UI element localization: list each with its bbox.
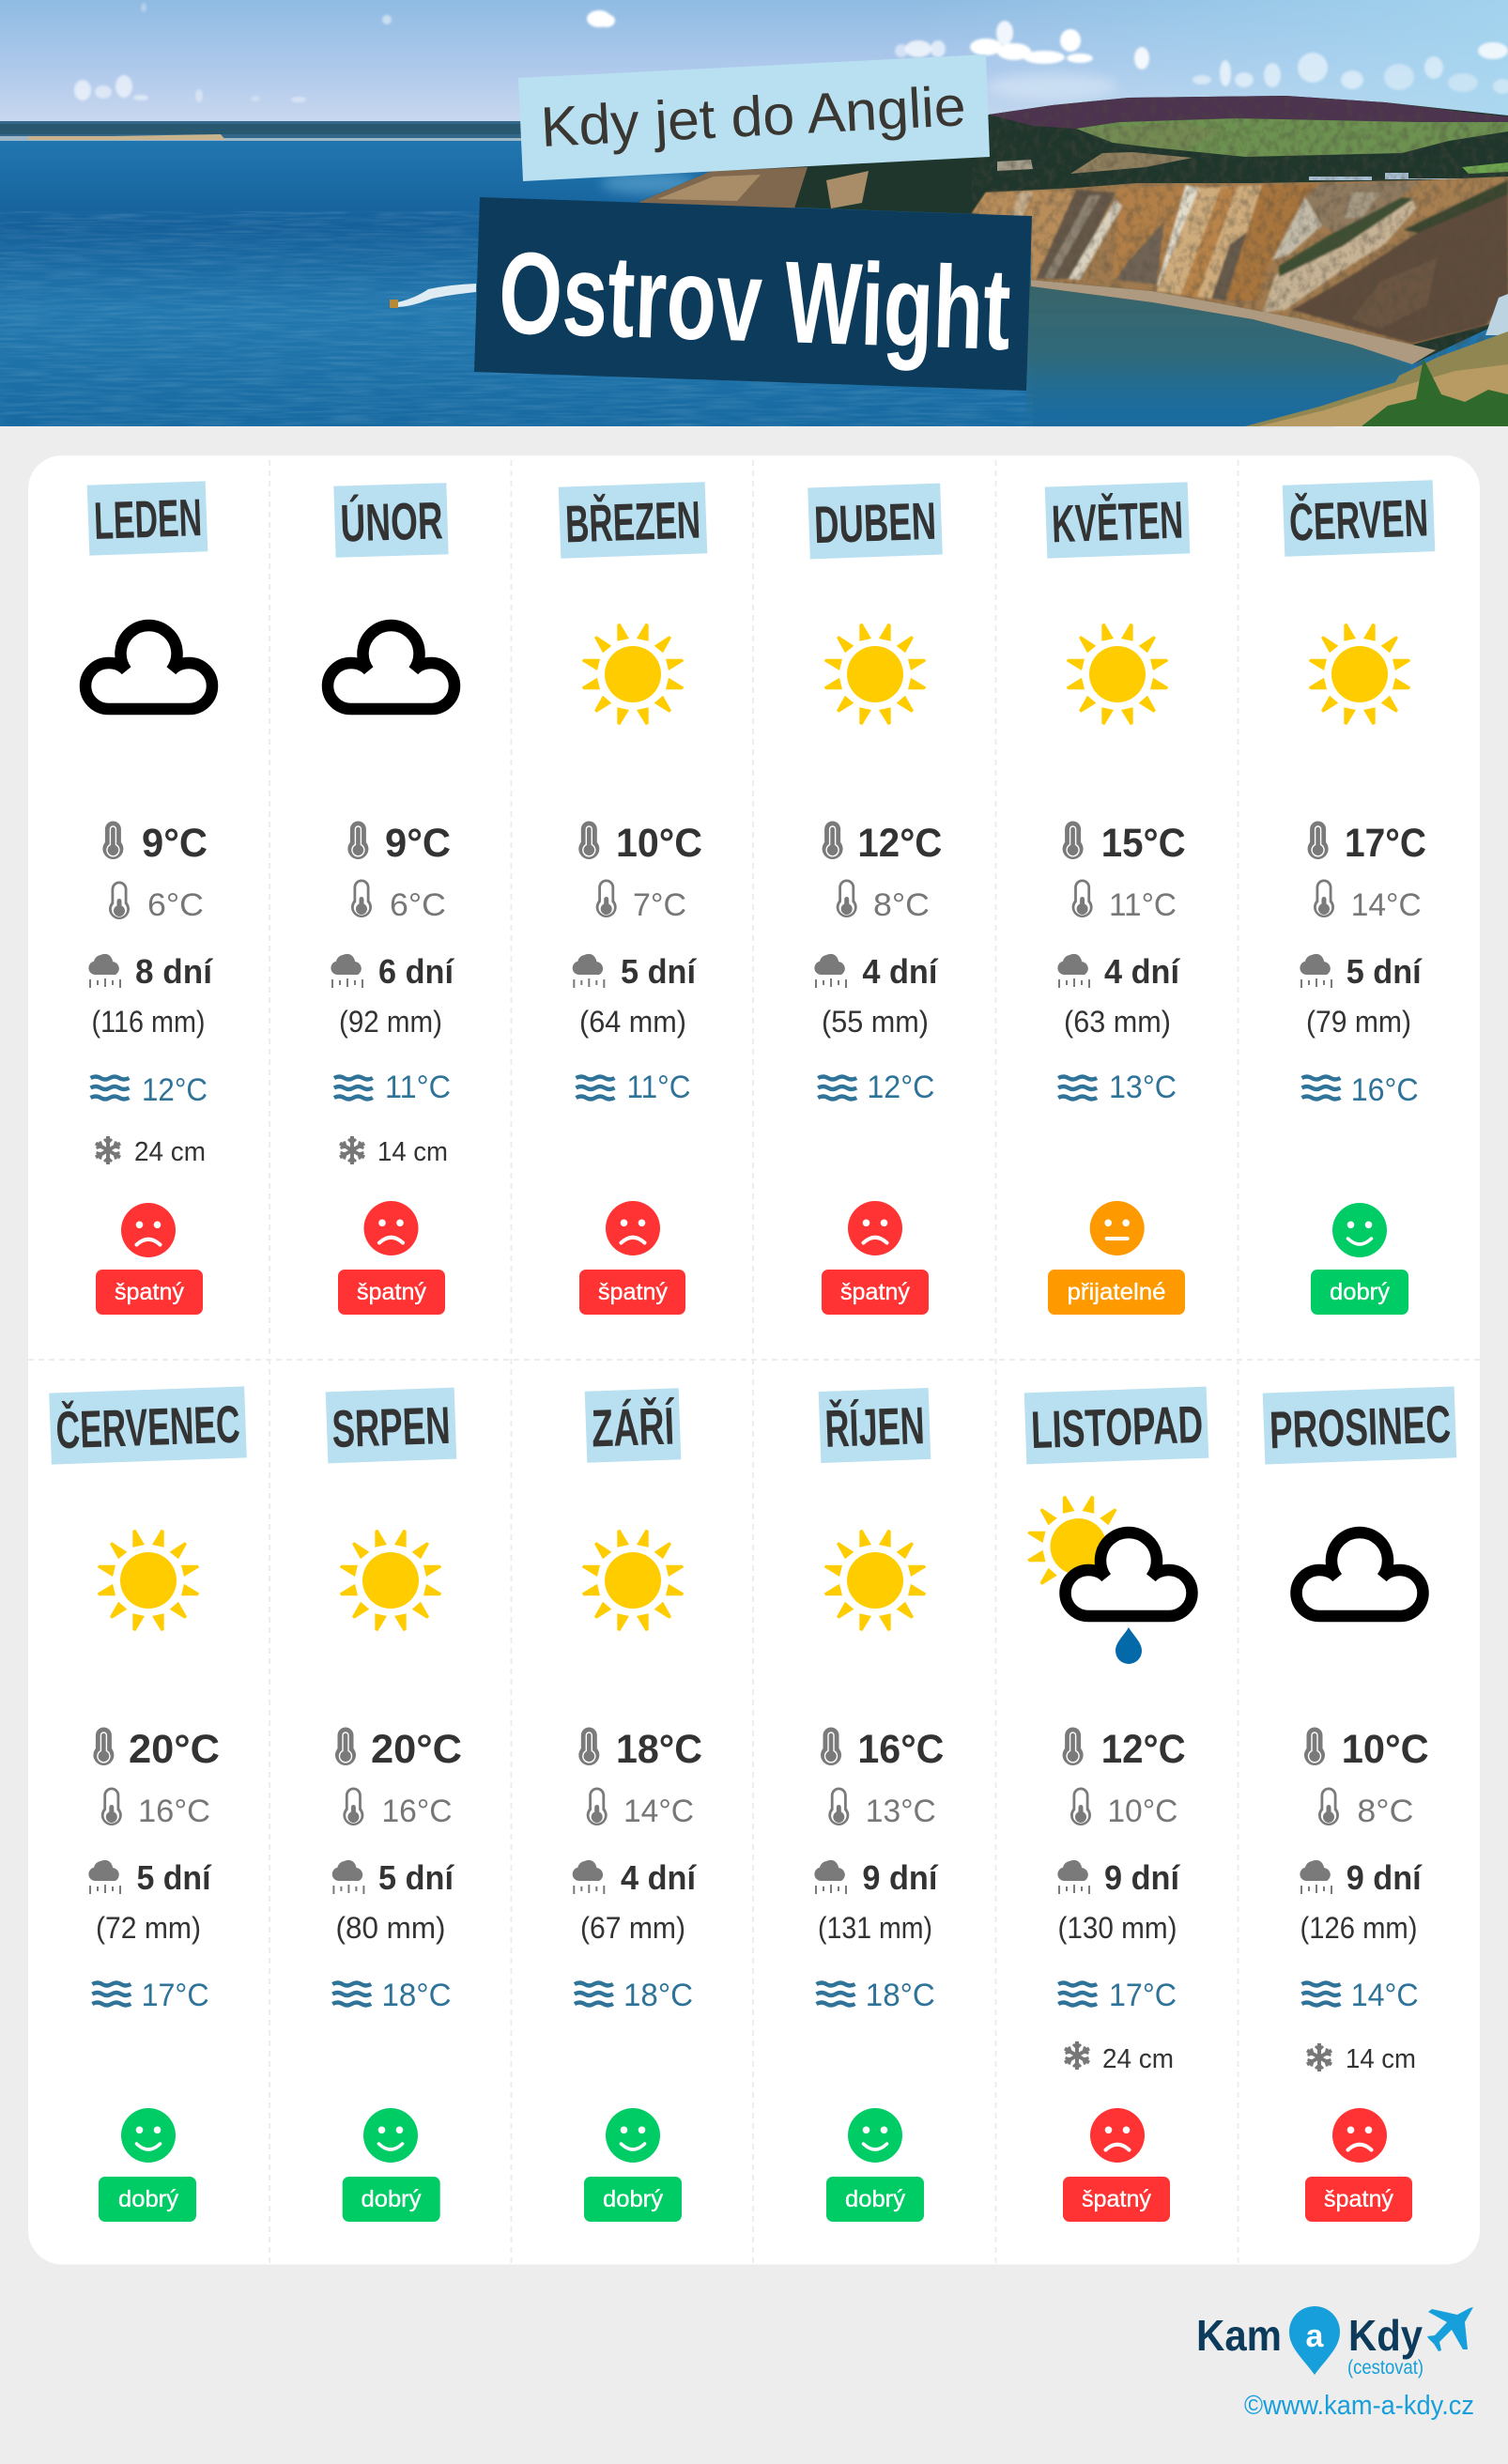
land base bbox=[639, 96, 1508, 364]
month column: Leden bbox=[85, 481, 213, 1315]
sea temperature bbox=[818, 1070, 934, 1105]
month label bbox=[49, 1386, 247, 1465]
low temperature: 6°C bbox=[147, 887, 204, 923]
rating: good: dobrý bbox=[845, 2186, 906, 2212]
month label: LEDEN bbox=[93, 487, 203, 550]
rating: bad bbox=[822, 1201, 929, 1315]
precipitation: (64 mm) bbox=[579, 1005, 686, 1039]
month label: ZÁŘÍ bbox=[591, 1395, 676, 1458]
month label bbox=[819, 1388, 931, 1463]
low temperature bbox=[1314, 879, 1422, 923]
rating: good bbox=[1311, 1203, 1408, 1315]
high temperature: 12°C bbox=[1101, 1727, 1186, 1772]
rainy days: 9 dní bbox=[1346, 1858, 1423, 1897]
precipitation: (67 mm) bbox=[580, 1911, 685, 1945]
precipitation: (72 mm) bbox=[96, 1911, 201, 1945]
rating: bad: špatný bbox=[598, 1279, 668, 1305]
low temperature: 11°C bbox=[1109, 887, 1177, 923]
icon: sun bbox=[582, 624, 684, 725]
month column: Říjen bbox=[814, 1388, 944, 2222]
rainy days bbox=[573, 1858, 697, 1897]
low temperature: 14°C bbox=[1351, 887, 1422, 923]
sea temperature: 18°C bbox=[381, 1978, 451, 2013]
high temperature: 16°C bbox=[857, 1727, 944, 1772]
panel: months card bbox=[28, 455, 1480, 2265]
high temperature: 15°C bbox=[1101, 821, 1186, 866]
sea temperature bbox=[92, 1978, 209, 2013]
low temperature: 6°C bbox=[390, 887, 446, 923]
rating: bad: špatný bbox=[1082, 2186, 1151, 2212]
rainy days: 5 dní bbox=[1346, 952, 1423, 991]
rating: good: dobrý bbox=[118, 2186, 179, 2212]
low temperature bbox=[101, 1788, 210, 1829]
snow bbox=[1307, 2043, 1416, 2074]
icon: sun bbox=[582, 1530, 684, 1631]
high temperature bbox=[1304, 1727, 1429, 1772]
month label: ŘÍJEN bbox=[823, 1395, 926, 1458]
rating: good bbox=[343, 2108, 440, 2222]
icon: sun bbox=[824, 1530, 926, 1631]
low temperature bbox=[828, 1788, 936, 1829]
sea temperature: 18°C bbox=[866, 1978, 935, 2013]
rating: good bbox=[99, 2108, 196, 2222]
high temperature: 17°C bbox=[1345, 821, 1426, 866]
low temperature bbox=[587, 1788, 694, 1829]
low temperature: 13°C bbox=[866, 1794, 936, 1829]
sea temperature bbox=[1058, 1070, 1177, 1105]
month label bbox=[559, 482, 707, 559]
logo: Kam a Kdy: Kam bbox=[1196, 2311, 1282, 2360]
icon: sun bbox=[824, 624, 926, 725]
month label: BŘEZEN bbox=[564, 490, 701, 553]
low temperature bbox=[1070, 1788, 1177, 1829]
month label bbox=[808, 484, 943, 559]
rating: bad bbox=[96, 1203, 203, 1315]
high temperature bbox=[347, 821, 451, 866]
high temperature bbox=[823, 821, 942, 866]
month label bbox=[1263, 1386, 1456, 1465]
month label: LISTOPAD bbox=[1030, 1394, 1204, 1459]
precipitation: (126 mm) bbox=[1300, 1911, 1418, 1945]
rainy days bbox=[1057, 952, 1180, 991]
month label bbox=[1024, 1387, 1208, 1464]
low temperature: 10°C bbox=[1107, 1794, 1177, 1829]
low temperature bbox=[351, 879, 446, 923]
high temperature bbox=[578, 821, 702, 866]
rainy days bbox=[814, 952, 938, 991]
sea temperature bbox=[817, 1978, 935, 2013]
rainy days: 4 dní bbox=[1104, 952, 1180, 991]
month label: ČERVEN bbox=[1288, 487, 1429, 552]
rainy days bbox=[1300, 952, 1423, 991]
low temperature bbox=[837, 879, 930, 923]
rating: acceptable bbox=[1048, 1201, 1185, 1315]
month label: ÚNOR bbox=[340, 490, 443, 553]
snow: 24 cm bbox=[134, 1137, 206, 1167]
snow: 14 cm bbox=[1346, 2044, 1416, 2074]
month label: KVĚTEN bbox=[1051, 490, 1184, 553]
month label bbox=[1045, 482, 1190, 559]
rating: bad: špatný bbox=[357, 1279, 426, 1305]
snow: 14 cm bbox=[377, 1137, 448, 1167]
rainy days: 9 dní bbox=[1104, 1858, 1180, 1897]
sea temperature bbox=[575, 1978, 693, 2013]
low temperature bbox=[1318, 1788, 1413, 1829]
rainy days bbox=[88, 952, 213, 991]
rainy days bbox=[1057, 1858, 1180, 1897]
rainy days bbox=[88, 1858, 211, 1897]
month column: Duben bbox=[808, 484, 943, 1315]
rating: good: dobrý bbox=[603, 2186, 664, 2212]
sea temperature bbox=[1058, 1978, 1177, 2013]
icon: airplane bbox=[1427, 2307, 1473, 2351]
rainy days bbox=[573, 952, 697, 991]
low temperature: 8°C bbox=[873, 887, 930, 923]
precipitation: (55 mm) bbox=[822, 1005, 929, 1039]
sea temperature: 17°C bbox=[142, 1978, 209, 2013]
rainy days: 9 dní bbox=[862, 1858, 938, 1897]
rating: bad bbox=[1063, 2108, 1170, 2222]
sea temperature: 12°C bbox=[867, 1070, 934, 1105]
icon: sun bbox=[98, 1530, 199, 1631]
logo: Kam a Kdy: (cestovat) bbox=[1347, 2357, 1423, 2379]
low temperature: 14°C bbox=[623, 1794, 694, 1829]
high temperature bbox=[1063, 821, 1186, 866]
sea temperature: 16°C bbox=[1351, 1072, 1419, 1108]
icon: sun bbox=[1067, 624, 1168, 725]
low temperature bbox=[596, 879, 686, 923]
month column: Srpen bbox=[326, 1388, 462, 2222]
icon: cloud bbox=[328, 625, 454, 709]
precipitation: (92 mm) bbox=[339, 1005, 442, 1039]
high temperature: 18°C bbox=[616, 1727, 702, 1772]
month label bbox=[1283, 480, 1435, 557]
high temperature: 20°C bbox=[129, 1727, 220, 1772]
sea temperature: 17°C bbox=[1109, 1978, 1177, 2013]
low temperature bbox=[109, 881, 204, 923]
logo: Kam a Kdy: Kdy bbox=[1348, 2311, 1423, 2360]
title banner: Ostrov Wight bbox=[474, 197, 1032, 391]
header photo: coastline with cliffs bbox=[0, 0, 1508, 426]
high temperature bbox=[578, 1727, 702, 1772]
month column: Červen bbox=[1283, 480, 1435, 1315]
sea temperature bbox=[334, 1070, 451, 1105]
rainy days bbox=[332, 1858, 454, 1897]
rainy days: 5 dní bbox=[621, 952, 697, 991]
high temperature bbox=[821, 1727, 944, 1772]
precipitation: (131 mm) bbox=[818, 1911, 932, 1945]
precipitation: (79 mm) bbox=[1306, 1005, 1411, 1039]
title banner: Ostrov Wight: Ostrov Wight bbox=[497, 228, 1012, 375]
sea temperature bbox=[1301, 1978, 1419, 2013]
rating: good: dobrý bbox=[361, 2186, 422, 2212]
month column: Červenec bbox=[49, 1386, 247, 2222]
high temperature: 10°C bbox=[616, 821, 702, 866]
month column: Březen bbox=[559, 482, 707, 1315]
sea temperature: 14°C bbox=[1351, 1978, 1419, 2013]
rainy days: 5 dní bbox=[137, 1858, 211, 1897]
rating: acceptable: přijatelné bbox=[1067, 1279, 1166, 1305]
rating: good bbox=[584, 2108, 682, 2222]
sea temperature: 11°C bbox=[385, 1070, 451, 1105]
heading label: Kdy jet do Anglie: Kdy jet do Anglie bbox=[539, 74, 967, 159]
sea temperature: 13°C bbox=[1109, 1070, 1177, 1105]
high temperature: 9°C bbox=[385, 821, 451, 866]
month label bbox=[585, 1388, 681, 1463]
rainy days: 5 dní bbox=[378, 1858, 454, 1897]
sea temperature bbox=[90, 1072, 208, 1108]
rainy days bbox=[814, 1858, 938, 1897]
month label: DUBEN bbox=[813, 491, 937, 554]
low temperature: 7°C bbox=[633, 887, 686, 923]
rainy days: 4 dní bbox=[621, 1858, 697, 1897]
high temperature bbox=[1308, 821, 1426, 866]
month label bbox=[326, 1388, 456, 1463]
snow bbox=[1065, 2041, 1174, 2074]
precipitation: (80 mm) bbox=[336, 1911, 445, 1945]
rainy days: 8 dní bbox=[135, 952, 213, 991]
rating: bad: špatný bbox=[115, 1279, 184, 1305]
rating: bad: špatný bbox=[1324, 2186, 1393, 2212]
high temperature bbox=[1063, 1727, 1186, 1772]
rating: bad bbox=[579, 1201, 685, 1315]
month label bbox=[333, 483, 449, 558]
logo: Kam a Kdy: a bbox=[1306, 2318, 1325, 2354]
icon: sun bbox=[1309, 624, 1410, 725]
precipitation: (116 mm) bbox=[92, 1005, 205, 1039]
icon: sun behind rain cloud bbox=[1027, 1496, 1192, 1664]
precipitation: (130 mm) bbox=[1057, 1911, 1177, 1945]
sea temperature bbox=[1301, 1072, 1419, 1108]
high temperature: 10°C bbox=[1342, 1727, 1429, 1772]
sea temperature bbox=[577, 1070, 691, 1105]
sea temperature bbox=[332, 1978, 451, 2013]
sea temperature: 12°C bbox=[142, 1072, 208, 1108]
website credit: ©www.kam-a-kdy.cz bbox=[1244, 2391, 1474, 2421]
low temperature bbox=[343, 1788, 453, 1829]
logo: Kam a Kdy bbox=[1196, 2306, 1473, 2379]
precipitation: (63 mm) bbox=[1064, 1005, 1171, 1039]
sea temperature: 11°C bbox=[627, 1070, 691, 1105]
low temperature: 16°C bbox=[138, 1794, 210, 1829]
high temperature bbox=[102, 821, 208, 866]
rating: bad bbox=[1305, 2108, 1412, 2222]
rainy days: 6 dní bbox=[378, 952, 454, 991]
snow bbox=[96, 1136, 206, 1167]
high temperature: 20°C bbox=[371, 1727, 462, 1772]
month column: Září bbox=[573, 1388, 702, 2222]
rainy days bbox=[1300, 1858, 1423, 1897]
rainy days bbox=[331, 952, 454, 991]
sea temperature: 18°C bbox=[623, 1978, 693, 2013]
rating: good: dobrý bbox=[1330, 1279, 1391, 1305]
heading label: Kdy jet do Anglie bbox=[518, 54, 990, 181]
month column: Únor bbox=[328, 483, 454, 1315]
icon: cloud bbox=[1297, 1532, 1423, 1616]
icon: location pin bbox=[1289, 2306, 1340, 2375]
snow: 24 cm bbox=[1102, 2044, 1174, 2074]
rainy days: 4 dní bbox=[862, 952, 938, 991]
month column: Květen bbox=[1045, 482, 1190, 1315]
rating: bad: špatný bbox=[840, 1279, 910, 1305]
low temperature bbox=[1072, 879, 1177, 923]
month column: Listopad bbox=[1024, 1387, 1208, 2222]
high temperature: 12°C bbox=[857, 821, 942, 866]
icon: cloud bbox=[85, 625, 212, 709]
rating: bad bbox=[338, 1201, 445, 1315]
month label bbox=[87, 481, 208, 556]
high temperature: 9°C bbox=[142, 821, 208, 866]
month label: ČERVENEC bbox=[55, 1394, 241, 1459]
cliff face with stripes bbox=[972, 177, 1508, 345]
month label: SRPEN bbox=[331, 1395, 452, 1458]
icon: sun bbox=[340, 1530, 441, 1631]
month column: Prosinec bbox=[1263, 1386, 1456, 2222]
snow bbox=[340, 1136, 448, 1167]
low temperature: 8°C bbox=[1357, 1794, 1413, 1829]
low temperature: 16°C bbox=[381, 1794, 453, 1829]
rating: good bbox=[826, 2108, 924, 2222]
